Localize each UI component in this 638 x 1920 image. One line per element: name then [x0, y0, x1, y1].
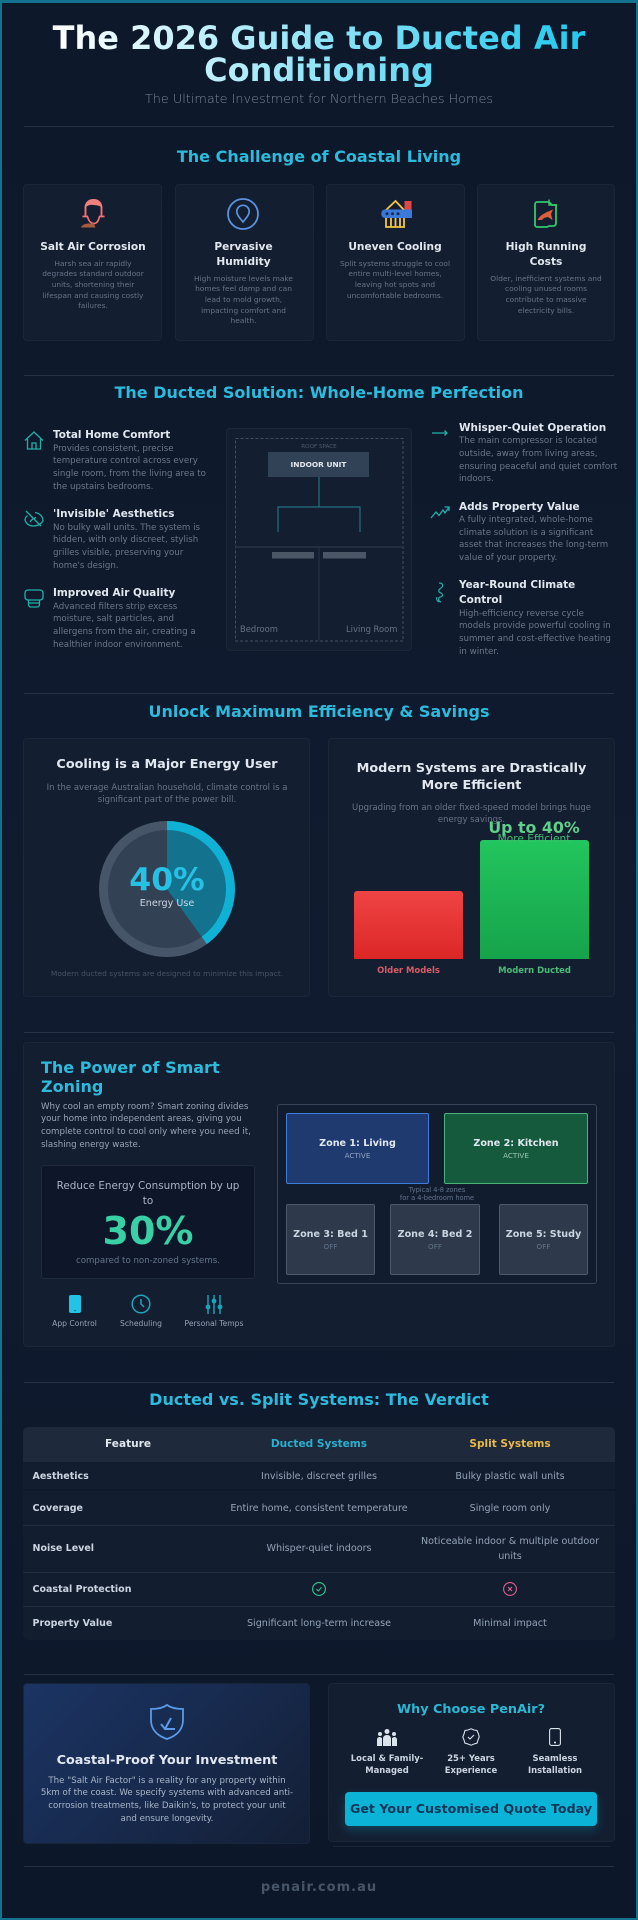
panel: uneven cooling — [326, 184, 465, 341]
icon: bill — [534, 200, 557, 228]
text: allergens from the air, creating a — [53, 627, 196, 637]
text: complete control to cool only where you need it, — [41, 1127, 251, 1137]
icon: filter — [24, 589, 44, 608]
label: Installation — [528, 1765, 582, 1775]
label: Seamless — [533, 1753, 577, 1763]
room label: Living Room — [346, 624, 397, 634]
text: 5km of the coast. We specify systems with advanced anti- — [41, 1788, 293, 1798]
icon: phone — [69, 1295, 81, 1313]
donut chart — [99, 821, 235, 957]
panel title — [357, 760, 586, 792]
table header: Ducted Systems — [271, 1438, 367, 1450]
card text: leaving hot spots and — [355, 280, 435, 289]
icon: family — [377, 1729, 397, 1746]
label: Experience — [445, 1765, 497, 1775]
icon: arrow — [432, 430, 448, 436]
card title: Uneven Cooling — [348, 241, 442, 253]
comparison table — [23, 1427, 615, 1640]
label: Local & Family- — [351, 1753, 423, 1763]
text — [53, 602, 196, 650]
text — [53, 444, 206, 492]
card title: High Running — [506, 241, 586, 253]
text: hidden, with only discreet, stylish — [53, 535, 198, 545]
bar: modern ducted — [480, 840, 589, 959]
text: your home into independent areas, giving you — [41, 1114, 242, 1124]
card text: cooling unused rooms — [505, 284, 587, 293]
zone 4: Zone 4: Bed 2 — [398, 1228, 472, 1240]
row: aesthetics: Aesthetics — [32, 1470, 89, 1482]
card title: Salt Air Corrosion — [40, 241, 146, 253]
text: outside, away from living areas, — [459, 449, 598, 459]
heading: verdict: Ducted vs. Split Systems: The Verdict — [149, 1390, 489, 1409]
card text — [42, 259, 144, 310]
text: The "Salt Air Factor" is a reality for any property within — [48, 1776, 286, 1786]
card title: Costs — [530, 256, 562, 268]
feature: whisper quiet — [432, 422, 617, 484]
zone 1 — [286, 1113, 429, 1184]
icon: cross — [503, 1582, 517, 1596]
card title — [214, 241, 273, 268]
feature: year round climate — [436, 578, 611, 657]
panel: salt air corrosion — [23, 184, 162, 341]
panel text: significant part of the power bill. — [98, 795, 236, 805]
row: property value: Property Value — [32, 1618, 112, 1628]
table header: Split Systems — [469, 1438, 551, 1450]
heading: efficiency: Unlock Maximum Efficiency & Savings — [149, 702, 489, 721]
text: indoors. — [459, 474, 494, 484]
row: noise: Whisper-quiet indoors — [266, 1542, 372, 1554]
text: in winter. — [459, 647, 499, 657]
row: noise — [23, 1526, 615, 1573]
title: Conditioning — [204, 51, 434, 89]
indoor unit — [268, 452, 369, 477]
icon: headset — [81, 199, 104, 228]
row: noise: Noise Level — [32, 1542, 94, 1554]
text: temperature control across every — [53, 456, 198, 466]
icon: clock — [132, 1294, 150, 1314]
panel: cooling energy use — [23, 738, 310, 997]
icon: home — [24, 431, 44, 450]
call to action button: Get Your Customised Quote Today — [350, 1801, 592, 1816]
row: property value — [23, 1607, 615, 1640]
card text: lifespan and causing costly — [43, 291, 143, 300]
zones note: Typical 4-8 zones — [409, 1186, 465, 1194]
zone 1: ACTIVE — [345, 1151, 370, 1160]
card text: failures. — [78, 301, 108, 310]
zone 3: OFF — [324, 1242, 337, 1251]
text — [459, 608, 611, 657]
caption: Modern ducted systems are designed to minimize this impact. — [51, 969, 283, 978]
zones note — [400, 1186, 474, 1202]
zone 5: OFF — [537, 1242, 550, 1251]
text: healthier indoor environment. — [53, 640, 183, 650]
title: Improved Air Quality — [53, 586, 175, 598]
title — [24, 22, 614, 87]
card text: health. — [231, 316, 256, 325]
bar value: Up to 40% — [488, 818, 580, 837]
card text — [490, 274, 602, 315]
label: Scheduling — [120, 1319, 162, 1328]
card text — [194, 274, 293, 325]
row: aesthetics: Bulky plastic wall units — [455, 1470, 565, 1482]
panel text: energy savings. — [438, 815, 505, 825]
zone 3 — [286, 1204, 375, 1275]
label: Managed — [365, 1765, 409, 1775]
panel text: In the average Australian household, climate control is a — [47, 783, 287, 793]
footer url: penair.com.au — [261, 1880, 377, 1895]
title: 'Invisible' Aesthetics — [53, 508, 174, 520]
title: Coastal-Proof Your Investment — [57, 1752, 277, 1768]
text: High-efficiency reverse cycle — [459, 608, 584, 618]
zone 4 — [390, 1204, 480, 1275]
zone 2: ACTIVE — [503, 1151, 529, 1160]
card text: High moisture levels make — [194, 274, 293, 283]
title: Adds Property Value — [459, 500, 580, 512]
icon: check — [312, 1582, 326, 1596]
card text: contribute to massive — [505, 295, 587, 304]
text — [41, 1775, 293, 1826]
feature: property value — [430, 500, 608, 563]
heading: The Power of Smart — [41, 1058, 220, 1077]
text — [53, 523, 200, 571]
text: Why cool an empty room? Smart zoning divides — [41, 1102, 248, 1112]
diagram: ducted house — [226, 428, 412, 651]
text: value of your property. — [459, 553, 557, 563]
title: Why Choose PenAir? — [397, 1702, 545, 1716]
zone 3: Zone 3: Bed 1 — [293, 1228, 368, 1240]
label: 25+ Years — [447, 1753, 495, 1763]
bar label: Older Models — [377, 965, 440, 975]
panel: pervasive humidity — [175, 184, 314, 341]
panel text: Upgrading from an older fixed-speed model brings huge — [352, 803, 591, 813]
feature: invisible aesthetics — [24, 508, 200, 571]
icon: wave — [436, 582, 444, 603]
row: noise: units — [498, 1550, 522, 1562]
stat lead: to — [143, 1194, 153, 1206]
text: climate solution is a significant — [459, 528, 593, 538]
stat lead: Reduce Energy Consumption by up — [57, 1180, 239, 1192]
label: App Control — [52, 1319, 97, 1328]
title: Whisper-Quiet Operation — [459, 422, 606, 434]
subtitle: The Ultimate Investment for Northern Beaches Homes — [145, 92, 493, 107]
title: The 2026 Guide to Ducted Air — [53, 19, 585, 57]
table header: Feature — [105, 1438, 151, 1450]
text: Provides consistent, precise — [53, 444, 174, 454]
stat lead — [57, 1180, 239, 1206]
card text: Older, inefficient systems and — [490, 274, 602, 283]
card text: uncomfortable bedrooms. — [347, 291, 443, 300]
card text: Harsh sea air rapidly — [54, 259, 132, 268]
text: summer and cost-effective heating — [459, 634, 611, 644]
row: aesthetics: Invisible, discreet grilles — [261, 1470, 377, 1482]
row: coastal protection: Coastal Protection — [32, 1584, 131, 1594]
icon: badge — [462, 1728, 480, 1746]
stat value: 30% — [103, 1209, 193, 1253]
donut label: Energy Use — [140, 898, 194, 909]
card text: degrades standard outdoor — [42, 269, 144, 278]
icon: trending up — [430, 506, 450, 518]
row: coverage: Coverage — [32, 1502, 83, 1514]
card text: units, shortening their — [52, 280, 134, 289]
text: Advanced filters strip excess — [53, 602, 177, 612]
feature: improved air quality — [24, 586, 196, 650]
panel: high running costs — [477, 184, 615, 341]
table header — [23, 1427, 615, 1462]
room label: Bedroom — [240, 624, 278, 634]
row: coverage — [23, 1491, 615, 1526]
text: slashing energy waste. — [41, 1140, 141, 1150]
text: the upstairs bedrooms. — [53, 482, 153, 492]
text: corrosion treatments, like Daikin's, to protect your unit — [48, 1801, 286, 1811]
indoor unit: INDOOR UNIT — [291, 460, 346, 469]
row: coastal protection — [23, 1573, 615, 1607]
text: models provide powerful cooling in — [459, 621, 611, 631]
panel title: More Efficient — [422, 778, 521, 792]
bar: older models — [354, 891, 463, 959]
zone 2 — [444, 1113, 588, 1184]
row: property value: Minimal impact — [473, 1618, 547, 1628]
roof space label: ROOF SPACE — [301, 444, 337, 450]
icon: sliders — [206, 1295, 222, 1314]
text: The main compressor is located — [459, 436, 597, 446]
card title: Humidity — [216, 256, 271, 268]
text: No bulky wall units. The system is — [53, 523, 200, 533]
text: single room, from the living area to — [53, 469, 206, 479]
text — [459, 436, 617, 484]
zone 5 — [498, 1204, 588, 1275]
icon: phone outline — [549, 1728, 561, 1746]
text: moisture, salt particles, and — [53, 614, 174, 624]
heading — [41, 1058, 220, 1096]
icon: house hot and cold — [381, 200, 412, 228]
card text: impacting comfort and — [201, 306, 286, 315]
row: property value: Significant long-term increase — [247, 1618, 391, 1628]
zone 5: Zone 5: Study — [506, 1228, 581, 1240]
text: grilles visible, preserving your — [53, 548, 183, 558]
row: coverage: Single room only — [470, 1502, 550, 1514]
zone plan — [277, 1104, 597, 1284]
card text: entire multi-level homes, — [348, 269, 442, 278]
text: ensuring peaceful and quiet comfort — [459, 462, 617, 472]
donut value: 40% — [129, 862, 205, 898]
label — [528, 1752, 582, 1777]
card text: electricity bills. — [518, 306, 574, 315]
stat box — [41, 1165, 255, 1279]
row: aesthetics — [23, 1462, 615, 1491]
title: Year-Round Climate — [459, 578, 575, 590]
title: Total Home Comfort — [53, 428, 170, 440]
feature: total home comfort — [24, 428, 206, 492]
text: home's design. — [53, 561, 119, 571]
title: Control — [459, 594, 502, 606]
call to action button — [345, 1792, 597, 1826]
label: Personal Temps — [185, 1319, 243, 1328]
panel text — [352, 803, 591, 825]
icon: moisture — [227, 198, 259, 230]
icon: eye off — [24, 510, 44, 527]
label — [445, 1752, 497, 1777]
text: asset that increases the long-term — [459, 540, 608, 550]
text — [459, 515, 608, 563]
house outline and ducts — [235, 438, 404, 642]
panel: why choose penair — [328, 1683, 615, 1842]
card title — [506, 241, 586, 268]
card text: Split systems struggle to cool — [340, 259, 450, 268]
panel title: Modern Systems are Drastically — [357, 760, 586, 776]
row: coverage: Entire home, consistent temperature — [230, 1502, 408, 1514]
text: A fully integrated, whole-home — [459, 515, 593, 525]
icon: shield — [150, 1704, 184, 1740]
text: and ensure longevity. — [121, 1814, 213, 1824]
card text: homes feel damp and can — [195, 284, 292, 293]
card text — [340, 259, 450, 300]
bar label: Modern Ducted — [498, 965, 571, 975]
zone 2: Zone 2: Kitchen — [473, 1138, 559, 1148]
panel: modern efficiency — [328, 738, 615, 997]
card title: Pervasive — [214, 241, 273, 253]
label — [351, 1752, 423, 1777]
panel: coastal proof — [23, 1683, 310, 1844]
row: noise: Noticeable indoor & multiple outdoor — [421, 1536, 599, 1546]
text — [41, 1102, 251, 1150]
panel text — [47, 783, 287, 805]
heading: challenge: The Challenge of Coastal Living — [177, 147, 461, 166]
zones note: for a 4-bedroom home — [400, 1194, 474, 1202]
zone 1: Zone 1: Living — [319, 1138, 396, 1148]
stat note: compared to non-zoned systems. — [76, 1256, 220, 1266]
heading: Zoning — [41, 1077, 103, 1096]
card text: lead to mold growth, — [205, 295, 282, 304]
title — [458, 578, 575, 606]
bar value label: More Efficient — [498, 833, 570, 845]
heading: solution: The Ducted Solution: Whole-Home Perfection — [114, 383, 524, 402]
zone 4: OFF — [428, 1242, 442, 1251]
header — [52, 19, 586, 107]
panel: smart zoning — [23, 1042, 615, 1347]
panel title: Cooling is a Major Energy User — [56, 756, 278, 772]
